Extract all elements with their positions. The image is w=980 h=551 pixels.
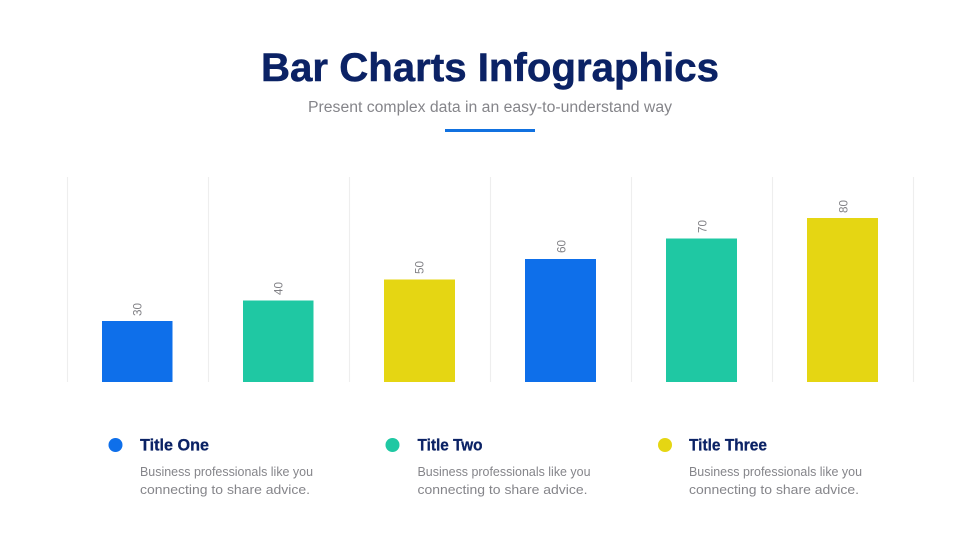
bar: 50 — [384, 261, 455, 382]
legend: title one: Title One — [140, 436, 209, 454]
bar: 60 — [525, 240, 596, 382]
bar chart — [68, 177, 914, 382]
legend: title three: Business professionals like you — [689, 464, 862, 479]
bar: 70: 70 — [696, 220, 710, 233]
legend: title three — [658, 436, 862, 497]
legend: title two — [386, 436, 590, 497]
bar: 80: 80 — [836, 200, 850, 213]
legend: title three: connecting to share advice. — [689, 482, 859, 497]
bar: 70 — [666, 220, 737, 382]
legend: title one — [108, 436, 313, 497]
bar: 40: 40 — [272, 282, 286, 295]
bar: 60: 60 — [554, 240, 568, 253]
legend: title two: Business professionals like you — [418, 464, 590, 479]
bar: 40 — [243, 282, 314, 382]
legend: title three: Title Three — [689, 436, 767, 454]
bar: 50: 50 — [412, 261, 426, 274]
legend: title two: Title Two — [418, 436, 482, 454]
legend: title two: connecting to share advice. — [418, 482, 588, 497]
title underline accent — [445, 129, 535, 132]
legend: title one: Business professionals like you — [140, 464, 313, 479]
subtitle: Present complex data in an easy-to-understand way — [308, 99, 672, 116]
legend: title one: connecting to share advice. — [140, 482, 310, 497]
title: Bar Charts Infographics — [261, 46, 719, 90]
bar: 30 — [102, 303, 172, 382]
bar: 80 — [807, 200, 878, 382]
bar: 30: 30 — [130, 303, 144, 316]
